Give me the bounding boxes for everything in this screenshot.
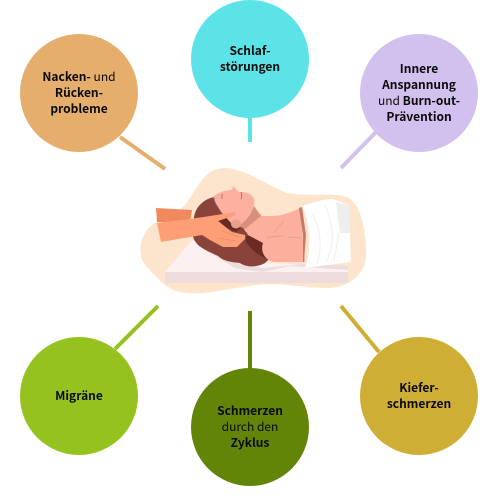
circle: Schmerzen durch den Zyklus — [191, 368, 309, 486]
circle: Nacken- und Rückenprobleme: Rücken- — [55, 84, 103, 101]
towel — [302, 199, 351, 268]
circle: Innere Anspannung: Prävention — [386, 108, 452, 125]
circle: Nacken- und Rückenprobleme: probleme — [50, 100, 108, 117]
circle: Nacken- und Rückenprobleme: Nacken- und — [42, 68, 116, 85]
circle: Innere Anspannung — [360, 34, 478, 152]
circle: Nacken- und Rückenprobleme — [20, 34, 138, 152]
circle: Migräne: Migräne — [55, 387, 103, 404]
finger lines — [219, 231, 239, 241]
circle: Schmerzen durch den Zyklus: durch den — [222, 418, 278, 435]
connector: Schlaf — [248, 116, 252, 142]
circle: Kieferschmerzen: schmerzen — [387, 395, 451, 412]
hair — [193, 197, 270, 266]
illustration: head massage — [140, 168, 366, 293]
circle: Kieferschmerzen: Kiefer- — [399, 379, 439, 396]
circle: Innere Anspannung: Innere — [400, 60, 438, 77]
body contour lines — [267, 222, 302, 238]
circle: Schmerzen durch den Zyklus: Zyklus — [231, 434, 269, 451]
face — [213, 186, 254, 226]
chest edge shadow — [299, 207, 306, 262]
neck shadow — [238, 206, 261, 229]
connector: Zyklus — [248, 311, 252, 370]
circle: Schlafstörungen: störungen — [220, 58, 280, 75]
ear — [231, 220, 241, 228]
body and neck — [243, 208, 305, 262]
circle: Schlafstörungen — [191, 0, 309, 118]
background blob — [140, 168, 366, 293]
connector: Migräne — [115, 306, 158, 349]
back arm — [156, 208, 192, 222]
circle: Innere Anspannung: Anspannung — [381, 76, 456, 93]
connector: Innere — [341, 132, 376, 168]
connector: Kiefer — [341, 306, 379, 352]
closed eyes — [214, 192, 242, 207]
circle: Innere Anspannung: und Burn-out- — [378, 92, 460, 109]
circle: Schmerzen durch den Zyklus: Schmerzen — [217, 402, 283, 419]
front hand and arm — [157, 212, 245, 247]
circle: Schlafstörungen: Schlaf- — [229, 42, 271, 59]
circle: Kieferschmerzen — [360, 337, 478, 455]
circle: Migräne — [20, 337, 138, 455]
connector: Nacken — [120, 137, 165, 169]
massage table — [165, 240, 348, 283]
